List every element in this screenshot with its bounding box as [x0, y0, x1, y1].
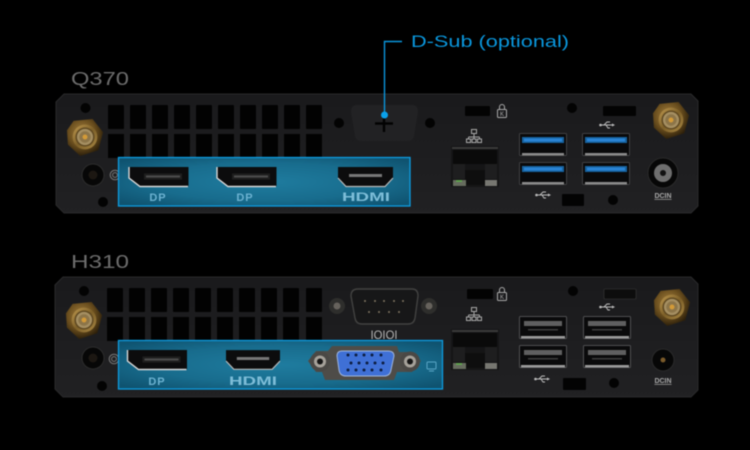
leader line — [384, 42, 402, 115]
chassis plate — [56, 94, 698, 213]
ventilation grille — [108, 105, 322, 158]
icon: USB bottom — [534, 376, 550, 382]
callout text: D-Sub (optional) — [411, 32, 569, 51]
audio jack — [82, 347, 104, 369]
leader dot — [381, 112, 388, 118]
port: HDMI — [338, 167, 393, 186]
audio jack — [82, 164, 104, 186]
panel: Q370 rear chassis — [56, 69, 698, 213]
model label: H310: H310 — [71, 252, 129, 272]
icon: audio — [109, 354, 119, 364]
port: DP 2 — [217, 167, 276, 187]
port: DP — [128, 350, 187, 370]
model label: Q370: Q370 — [71, 69, 129, 89]
port: USB 3 top right — [582, 134, 630, 156]
icon: USB top — [599, 122, 615, 128]
icon: lock — [498, 104, 506, 118]
port: RJ45 — [451, 329, 499, 370]
port: USB 3 bottom left — [520, 162, 566, 184]
D-Sub blank cover — [351, 105, 418, 141]
screw holes and slots — [80, 103, 636, 207]
ventilation grille — [107, 288, 322, 341]
port: USB 2 top right — [584, 316, 630, 338]
port: VGA — [308, 346, 421, 380]
label: DP 1: DP — [149, 192, 167, 204]
icon: USB bottom — [535, 192, 551, 198]
port: USB 2 bottom left — [520, 346, 566, 368]
icon: network — [466, 130, 482, 142]
port: USB 3 bottom right — [582, 162, 630, 184]
callout: D-Sub optional — [381, 32, 569, 118]
screw holes and slots — [79, 286, 636, 391]
icon: lock — [498, 288, 506, 301]
label: DCIN: DCIN — [654, 378, 672, 385]
serial port — [329, 289, 437, 324]
panel: H310 rear chassis — [55, 252, 698, 397]
port: USB 2 bottom right — [584, 346, 630, 368]
icon: USB top — [599, 304, 615, 310]
icon: monitor — [427, 362, 436, 371]
label: serial: IOIOI — [370, 328, 398, 342]
D-Sub plus mark — [375, 115, 393, 132]
highlight box: display outputs — [118, 340, 442, 389]
label: HDMI: HDMI — [229, 374, 277, 388]
label: DCIN: DCIN — [654, 193, 672, 200]
icon: network — [466, 308, 482, 320]
port: USB 3 top left — [520, 134, 566, 156]
port: DP 1 — [129, 167, 188, 187]
port: RJ45 — [451, 146, 499, 187]
left antenna connector — [67, 119, 103, 156]
DC-in jack — [648, 158, 678, 188]
right antenna connector — [654, 289, 690, 326]
left antenna connector — [66, 302, 102, 339]
chassis plate — [55, 277, 698, 397]
icon: audio — [110, 170, 120, 180]
port: USB 2 top left — [520, 316, 566, 338]
label: DP 2: DP — [236, 192, 254, 204]
DC-in jack — [652, 349, 674, 371]
right antenna connector — [653, 102, 689, 139]
port: HDMI — [226, 350, 280, 369]
label: DP: DP — [148, 376, 166, 388]
highlight box: display outputs — [118, 158, 410, 206]
label: HDMI: HDMI — [342, 190, 390, 204]
